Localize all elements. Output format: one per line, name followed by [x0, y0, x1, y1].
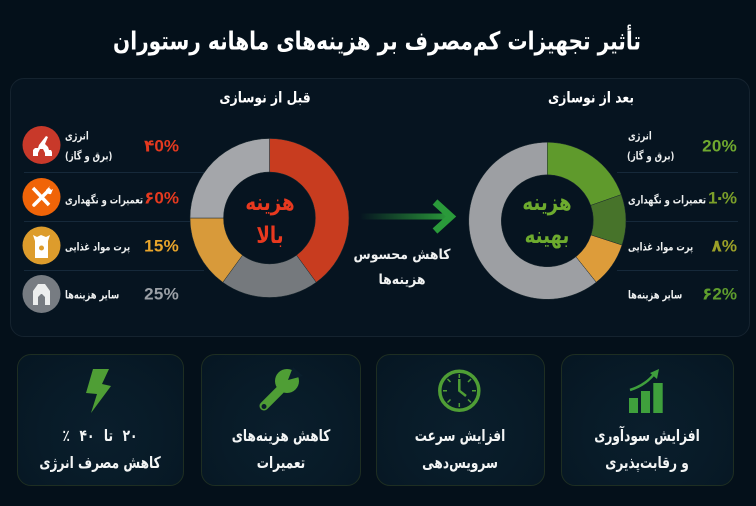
title: تأثیر تجهیزات کم‌مصرف بر هزینه‌های ماهانه رستوران [113, 26, 640, 56]
card text: repair saving: کاهش هزینه‌های [232, 426, 330, 445]
value: before other: 25% [144, 284, 179, 304]
heading: after renovation: بعد از نوسازی [548, 88, 634, 106]
card text: profitability: و رقابت‌پذیری [605, 453, 689, 472]
card text: service speed: افزایش سرعت [415, 426, 505, 445]
donut center: optimal cost: بهینه [525, 223, 569, 249]
legend before: energy: انرژی [65, 130, 89, 142]
heading: before renovation: قبل از نوسازی [219, 88, 311, 106]
legend after: maintenance: تعمیرات و نگهداری [628, 194, 706, 206]
value: after other: ۶2% [702, 284, 737, 304]
callout: noticeable cost reduction: هزینه‌ها [378, 272, 426, 288]
donut center: high cost: بالا [256, 222, 284, 248]
text: (برق و گاز) [627, 150, 674, 162]
card text: repair saving: تعمیرات [257, 453, 305, 472]
value: after maintenance: 1۰% [708, 188, 737, 208]
value: before food waste: 15% [144, 236, 179, 256]
text: (برق و گاز) [65, 150, 112, 162]
card: service speed [376, 354, 545, 486]
card: profitability [561, 354, 734, 486]
legend after: energy: انرژی [628, 130, 652, 142]
callout: noticeable cost reduction: کاهش محسوس [354, 247, 450, 263]
card text: profitability: افزایش سودآوری [594, 426, 700, 445]
card text: service speed: سرویس‌دهی [422, 453, 498, 472]
legend before: other costs: سایر هزینه‌ها [65, 288, 119, 302]
legend before: maintenance: تعمیرات و نگهداری [65, 194, 143, 206]
card text: energy saving: ۲۰ تا ۴۰ ٪ [63, 426, 137, 445]
donut center: optimal cost: هزینه [522, 190, 572, 216]
legend after: other costs: سایر هزینه‌ها [628, 288, 682, 302]
card text: profitability [594, 426, 700, 472]
legend after: food waste: پرت مواد غذایی [628, 240, 693, 254]
card text: energy saving: کاهش مصرف انرژی [39, 453, 161, 472]
value: after energy: 20% [702, 136, 737, 156]
card text: repair saving [232, 426, 330, 472]
card text: energy saving [39, 426, 161, 472]
donut center: high cost [245, 190, 295, 248]
value: before maintenance: ۶0% [144, 188, 179, 208]
legend before: food waste: پرت مواد غذایی [65, 240, 130, 254]
card: repair saving [201, 354, 361, 486]
card text: service speed [415, 426, 505, 472]
value: before energy: ۴0% [144, 136, 179, 156]
callout: noticeable cost reduction [354, 247, 450, 288]
donut center: optimal cost [522, 190, 572, 249]
card: energy saving [17, 354, 184, 486]
panel: cost comparison [10, 78, 750, 337]
donut center: high cost: هزینه [245, 190, 295, 216]
value: after food waste: ۸% [712, 236, 737, 256]
